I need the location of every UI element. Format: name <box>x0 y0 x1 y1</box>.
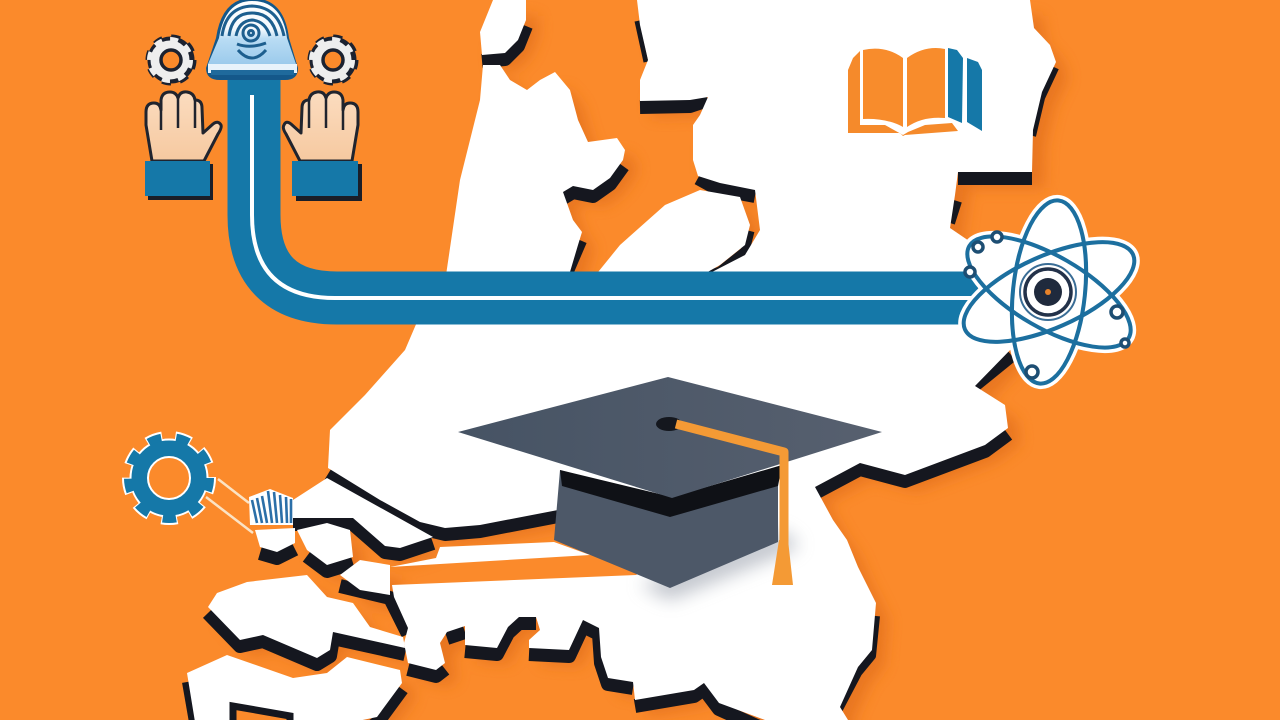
connector lines from gear to chip <box>206 479 253 533</box>
map: Netherlands landmass <box>187 0 1068 720</box>
icon: fingerprint scanner <box>206 0 298 80</box>
icon: fingerprint chip <box>249 489 293 525</box>
atom nucleus <box>1020 264 1076 320</box>
blue tube connector <box>252 80 978 298</box>
blue pages <box>948 48 963 123</box>
atom electrons <box>965 232 1129 378</box>
cap shadow <box>640 530 800 600</box>
cap button <box>656 417 682 431</box>
icon: right hand <box>283 92 362 201</box>
map land surface <box>187 0 1056 720</box>
map soft shadow <box>199 16 1068 720</box>
book cover <box>848 51 958 136</box>
tassel <box>772 540 793 585</box>
right page <box>907 48 945 127</box>
left page <box>863 49 903 127</box>
icon: open book <box>848 48 982 136</box>
icon: blue gear <box>131 440 207 516</box>
cap body <box>554 468 778 588</box>
icon: graduation cap <box>458 377 882 600</box>
tassel cord <box>676 424 784 545</box>
map dark extruded edges <box>187 21 1056 720</box>
icon: left gear <box>150 39 192 81</box>
icon: atom <box>950 197 1148 387</box>
icon: right gear <box>312 39 354 81</box>
mortarboard <box>458 377 882 498</box>
cap underside band <box>560 465 782 517</box>
icon: left hand <box>145 92 221 200</box>
schouwen inner notch <box>233 706 290 720</box>
